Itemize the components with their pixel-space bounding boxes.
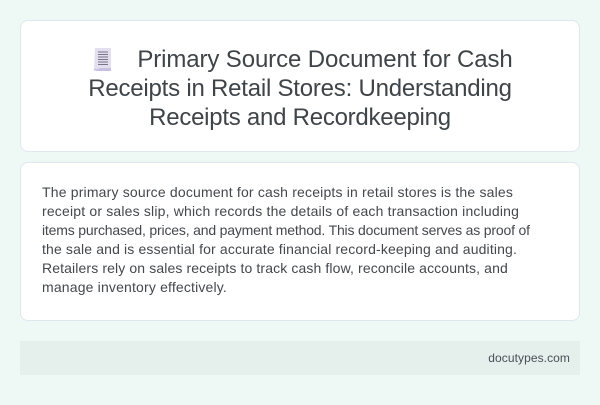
panel: description — [20, 162, 580, 321]
description text: manage inventory effectively. — [42, 279, 227, 295]
icon: receipt — [93, 48, 111, 71]
description text: The primary source document for cash receipts in retail stores is the sales — [42, 184, 513, 200]
description text: receipt or sales slip, which records the details of each transaction including — [42, 203, 519, 219]
footer bar — [20, 341, 580, 375]
title: Primary Source Document for Cash — [137, 46, 513, 73]
footer source text: docutypes.com — [488, 351, 570, 365]
description text: Retailers rely on sales receipts to track cash flow, reconcile accounts, and — [42, 260, 508, 276]
title — [88, 46, 513, 131]
description text — [42, 184, 530, 295]
description text: the sale and is essential for accurate financial record-keeping and auditing. — [42, 241, 517, 257]
title: Receipts and Recordkeeping — [149, 104, 451, 131]
panel: title card — [20, 20, 580, 152]
description text: items purchased, prices, and payment method. This document serves as proof of — [42, 222, 530, 238]
title: Receipts in Retail Stores: Understanding — [88, 75, 512, 102]
